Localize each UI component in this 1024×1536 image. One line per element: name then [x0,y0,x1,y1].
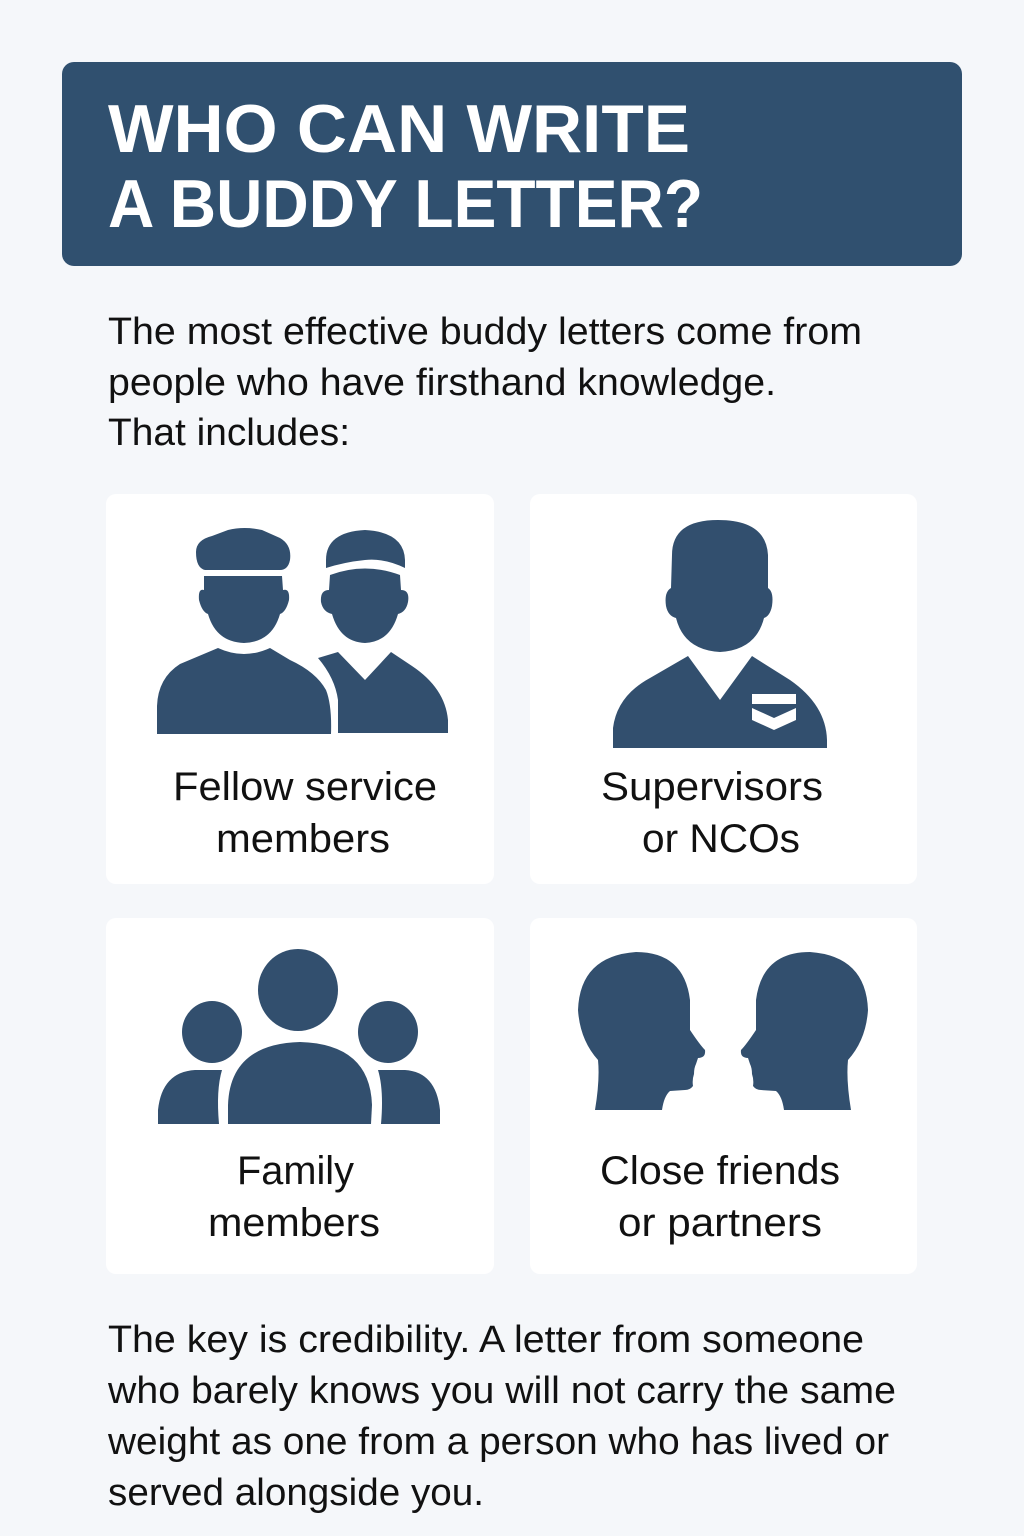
icon: family group [158,949,440,1124]
card: family: Family [237,1149,354,1193]
card: family [106,918,494,1274]
card: supervisors: Supervisors [601,765,823,809]
card: supervisors: or NCOs [642,817,800,861]
closing text: served alongside you. [108,1472,484,1514]
closing text: The key is credibility. A letter from someone [108,1319,864,1361]
closing text [107,1319,896,1514]
closing text: weight as one from a person who has lived or [107,1421,889,1463]
title banner: A BUDDY LETTER? [108,166,703,242]
intro text [108,311,862,454]
card: fellow service members [106,494,494,884]
intro text: The most effective buddy letters come from [108,311,862,353]
intro text: That includes: [108,412,350,454]
intro text: people who have firsthand knowledge. [108,362,776,404]
title banner [62,62,962,266]
card: close friends: Close friends [600,1149,840,1193]
closing text: who barely knows you will not carry the same [107,1370,896,1412]
card: close friends: or partners [618,1201,822,1245]
card: fellow service members: members [216,817,390,861]
icon: two service members [157,528,448,734]
title banner: WHO CAN WRITE [108,91,690,167]
icon: two facing heads [578,952,868,1110]
card: fellow service members: Fellow service [173,765,437,809]
card: close friends [530,918,917,1274]
card: supervisors [530,494,917,884]
card: family: members [208,1201,380,1245]
icon: supervisor with chevron [613,520,827,748]
